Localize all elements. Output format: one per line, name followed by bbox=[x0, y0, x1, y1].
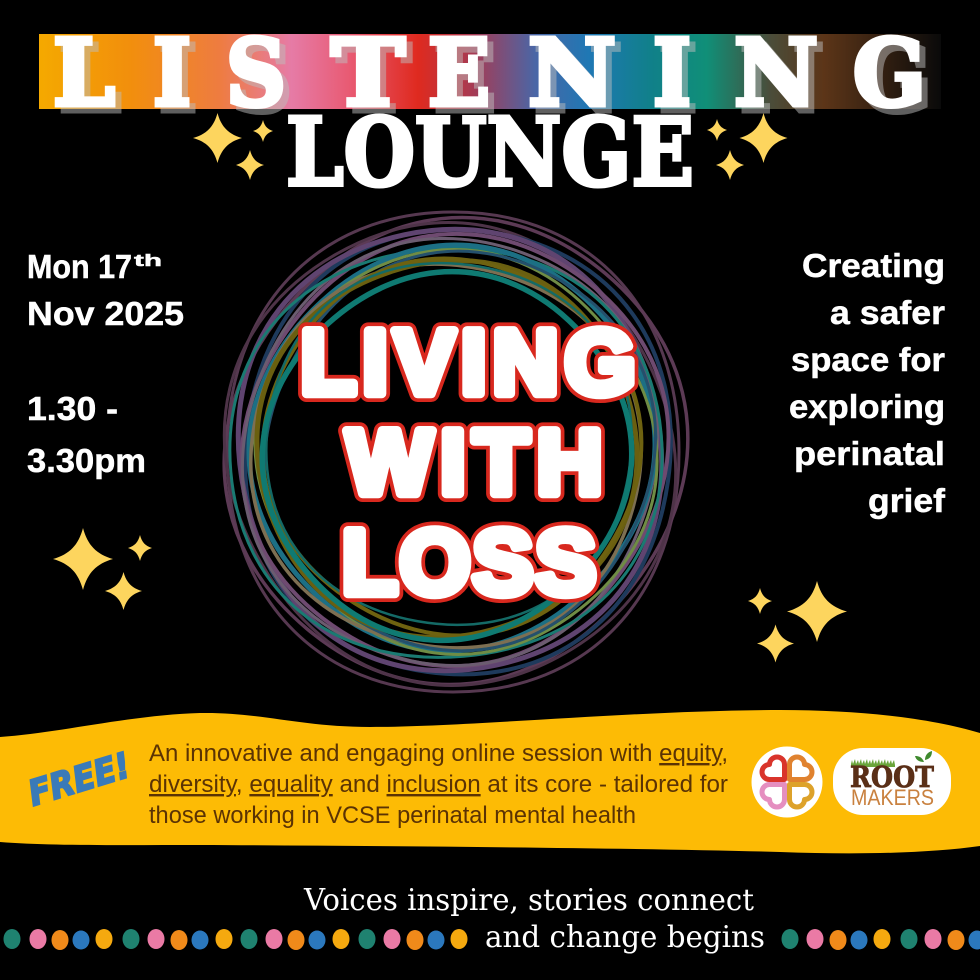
date and time: Mon 17 bbox=[27, 248, 132, 285]
title: LISTENING: G bbox=[853, 19, 926, 127]
date and time bbox=[27, 248, 184, 479]
title: LISTENING: N bbox=[734, 19, 818, 127]
headline: LIVING WITH LOSS: LOSS bbox=[342, 512, 596, 614]
tagline: right column bbox=[789, 247, 946, 519]
headline: LIVING WITH LOSS: WITH bbox=[346, 412, 602, 514]
tagline: right column: exploring bbox=[789, 388, 945, 425]
headline: LIVING WITH LOSS: WITH bbox=[346, 412, 602, 514]
closing strapline: Voices inspire, stories connect bbox=[303, 883, 754, 918]
tagline: right column: a safer bbox=[830, 294, 945, 331]
sparkles: lower right bbox=[748, 581, 847, 662]
yellow wavy banner bbox=[0, 710, 980, 853]
logo: four hearts bbox=[752, 746, 822, 818]
date and time: Nov 2025 bbox=[27, 295, 184, 332]
title: LISTENING: I bbox=[153, 19, 191, 127]
tagline: right column: Creating bbox=[802, 247, 945, 284]
scribbled rainbow circle bbox=[137, 131, 775, 771]
headline: LIVING WITH LOSS: LIVING bbox=[300, 312, 636, 414]
logo: Root Makers: MAKERS bbox=[851, 785, 934, 810]
title: LOUNGE: LOUNGE bbox=[286, 98, 694, 208]
banner description bbox=[149, 740, 728, 829]
title: LISTENING: L bbox=[53, 19, 115, 127]
dotted row: left bbox=[4, 929, 468, 950]
sparkles: top left bbox=[193, 113, 273, 180]
logo: Root Makers: ROOT bbox=[850, 760, 934, 794]
tagline: right column: space for bbox=[791, 341, 945, 378]
title bar: rainbow gradient bbox=[39, 34, 941, 109]
banner description: An innovative and engaging online session with equity, bbox=[149, 740, 728, 767]
title: LISTENING: E bbox=[428, 19, 490, 127]
title: LISTENING: T bbox=[331, 19, 405, 127]
banner description: diversity, equality and inclusion at its core - tailored for bbox=[149, 771, 728, 798]
title: LISTENING: N bbox=[528, 19, 616, 127]
tagline: right column: perinatal bbox=[794, 435, 945, 472]
headline: LIVING WITH LOSS: LIVING bbox=[300, 312, 636, 414]
date and time: th bbox=[134, 251, 162, 270]
tagline: right column: grief bbox=[868, 482, 946, 519]
date and time: 3.30pm bbox=[27, 442, 146, 479]
sparkles: top right bbox=[707, 113, 788, 180]
headline: LIVING WITH LOSS: LOSS bbox=[342, 512, 596, 614]
date and time: 1.30 - bbox=[27, 390, 118, 427]
closing strapline: and change begins bbox=[485, 920, 765, 955]
free label: FREE! bbox=[24, 746, 135, 815]
closing strapline bbox=[303, 883, 765, 955]
headline: LIVING WITH LOSS bbox=[300, 312, 636, 614]
dotted row: right bbox=[782, 929, 980, 950]
sparkles: lower left bbox=[53, 528, 152, 610]
banner description: those working in VCSE perinatal mental health bbox=[149, 802, 636, 829]
title: LISTENING bbox=[53, 19, 926, 127]
logo: Root Makers bbox=[833, 748, 951, 815]
title: LISTENING: I bbox=[653, 19, 691, 127]
title: LISTENING: S bbox=[226, 19, 286, 127]
